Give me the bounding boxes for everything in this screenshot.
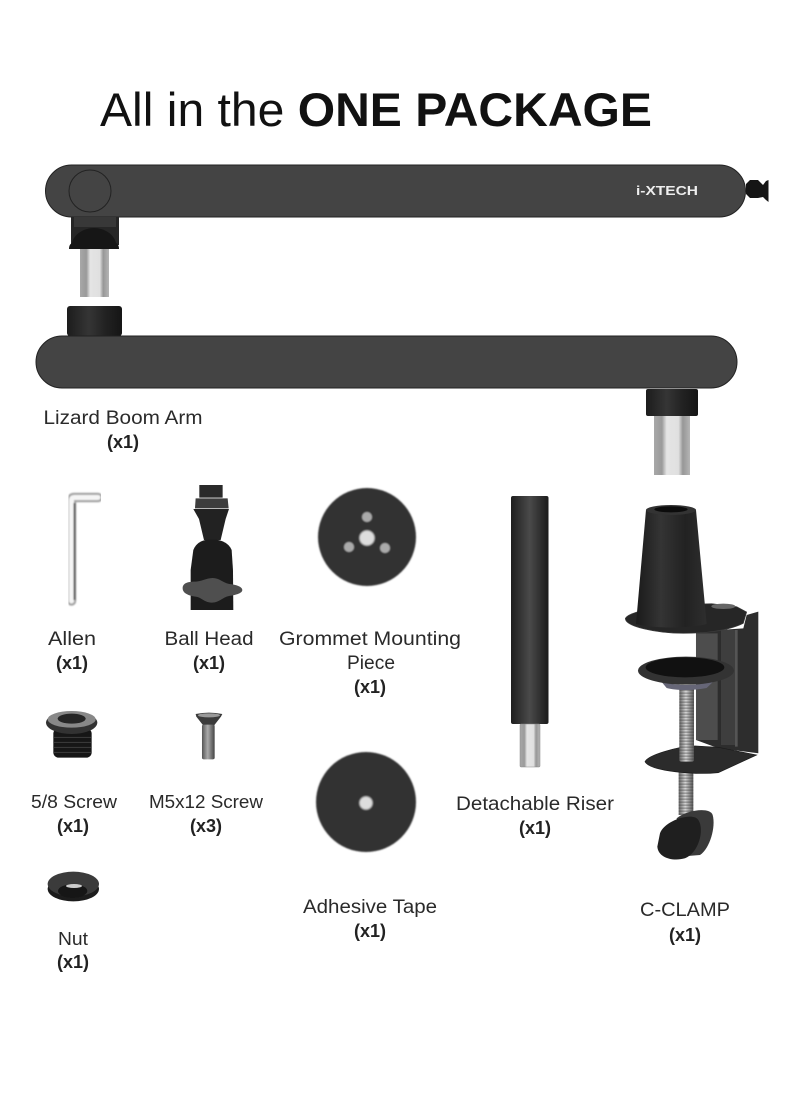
label: boom arm bbox=[44, 408, 202, 452]
threaded screw lower bbox=[679, 770, 693, 815]
icon: grommet mounting piece bbox=[318, 488, 416, 586]
label: m5x12 screw bbox=[149, 792, 264, 836]
label: detachable riser: Detachable Riser bbox=[456, 794, 615, 815]
label: detachable riser bbox=[456, 794, 615, 838]
label: 5/8 screw: 5/8 Screw bbox=[31, 792, 118, 812]
upper steel rod bbox=[80, 249, 109, 297]
label: grommet mounting piece: (x1) bbox=[354, 677, 386, 697]
cone bbox=[636, 510, 707, 627]
title: All in the ONE PACKAGE bbox=[100, 83, 652, 136]
label: adhesive tape: (x1) bbox=[354, 921, 386, 941]
label: detachable riser: (x1) bbox=[519, 818, 551, 838]
plate button bbox=[711, 604, 735, 609]
illustration: lizard boom arm bbox=[36, 165, 768, 475]
label: allen: Allen bbox=[48, 629, 96, 650]
label: grommet mounting piece: Grommet Mounting bbox=[279, 629, 461, 650]
label: m5x12 screw: (x3) bbox=[190, 816, 222, 836]
label: 5/8 screw bbox=[31, 792, 118, 836]
back bracket bbox=[696, 612, 758, 753]
label: m5x12 screw: M5x12 Screw bbox=[149, 792, 264, 812]
label: allen: (x1) bbox=[56, 653, 88, 673]
icon: c-clamp bbox=[625, 505, 758, 860]
upper arm bbox=[46, 165, 746, 217]
lower arm bbox=[36, 336, 737, 388]
label: c-clamp: C-CLAMP bbox=[640, 900, 730, 921]
label: ball head: Ball Head bbox=[164, 629, 254, 650]
label: c-clamp bbox=[640, 900, 730, 945]
icon: ball head bbox=[183, 485, 242, 610]
label: grommet mounting piece: Piece bbox=[347, 653, 395, 674]
base collar bbox=[646, 389, 698, 416]
lower joint collar bbox=[67, 306, 122, 336]
label: adhesive tape bbox=[303, 897, 437, 941]
thumb knob bbox=[657, 810, 714, 860]
icon: allen key bbox=[72, 498, 98, 601]
lower plate bbox=[645, 746, 757, 773]
microphone mount tip bbox=[746, 180, 768, 202]
label: adhesive tape: Adhesive Tape bbox=[303, 897, 437, 918]
label: nut: (x1) bbox=[57, 952, 89, 972]
pressure cup bbox=[638, 657, 734, 690]
icon: adhesive tape bbox=[316, 752, 416, 852]
cone opening bbox=[646, 505, 696, 515]
label: boom arm: (x1) bbox=[107, 432, 139, 452]
icon: 5/8 screw bbox=[46, 711, 97, 758]
icon: nut bbox=[48, 872, 99, 901]
upper joint bbox=[69, 217, 119, 249]
base steel rod bbox=[654, 416, 690, 475]
label: ball head: (x1) bbox=[193, 653, 225, 673]
label: nut: Nut bbox=[58, 929, 88, 949]
icon: m5x12 screw bbox=[196, 713, 222, 759]
upper plate bbox=[625, 604, 747, 633]
label: grommet mounting piece bbox=[279, 629, 461, 697]
label: allen bbox=[48, 629, 96, 673]
threaded screw upper bbox=[679, 685, 694, 762]
label: 5/8 screw: (x1) bbox=[57, 816, 89, 836]
label: nut bbox=[57, 929, 89, 972]
brand logo: i-XTECH bbox=[636, 184, 698, 198]
label: boom arm: Lizard Boom Arm bbox=[44, 408, 202, 429]
icon: detachable riser bbox=[511, 496, 548, 767]
label: ball head bbox=[164, 629, 254, 673]
label: c-clamp: (x1) bbox=[669, 925, 701, 945]
